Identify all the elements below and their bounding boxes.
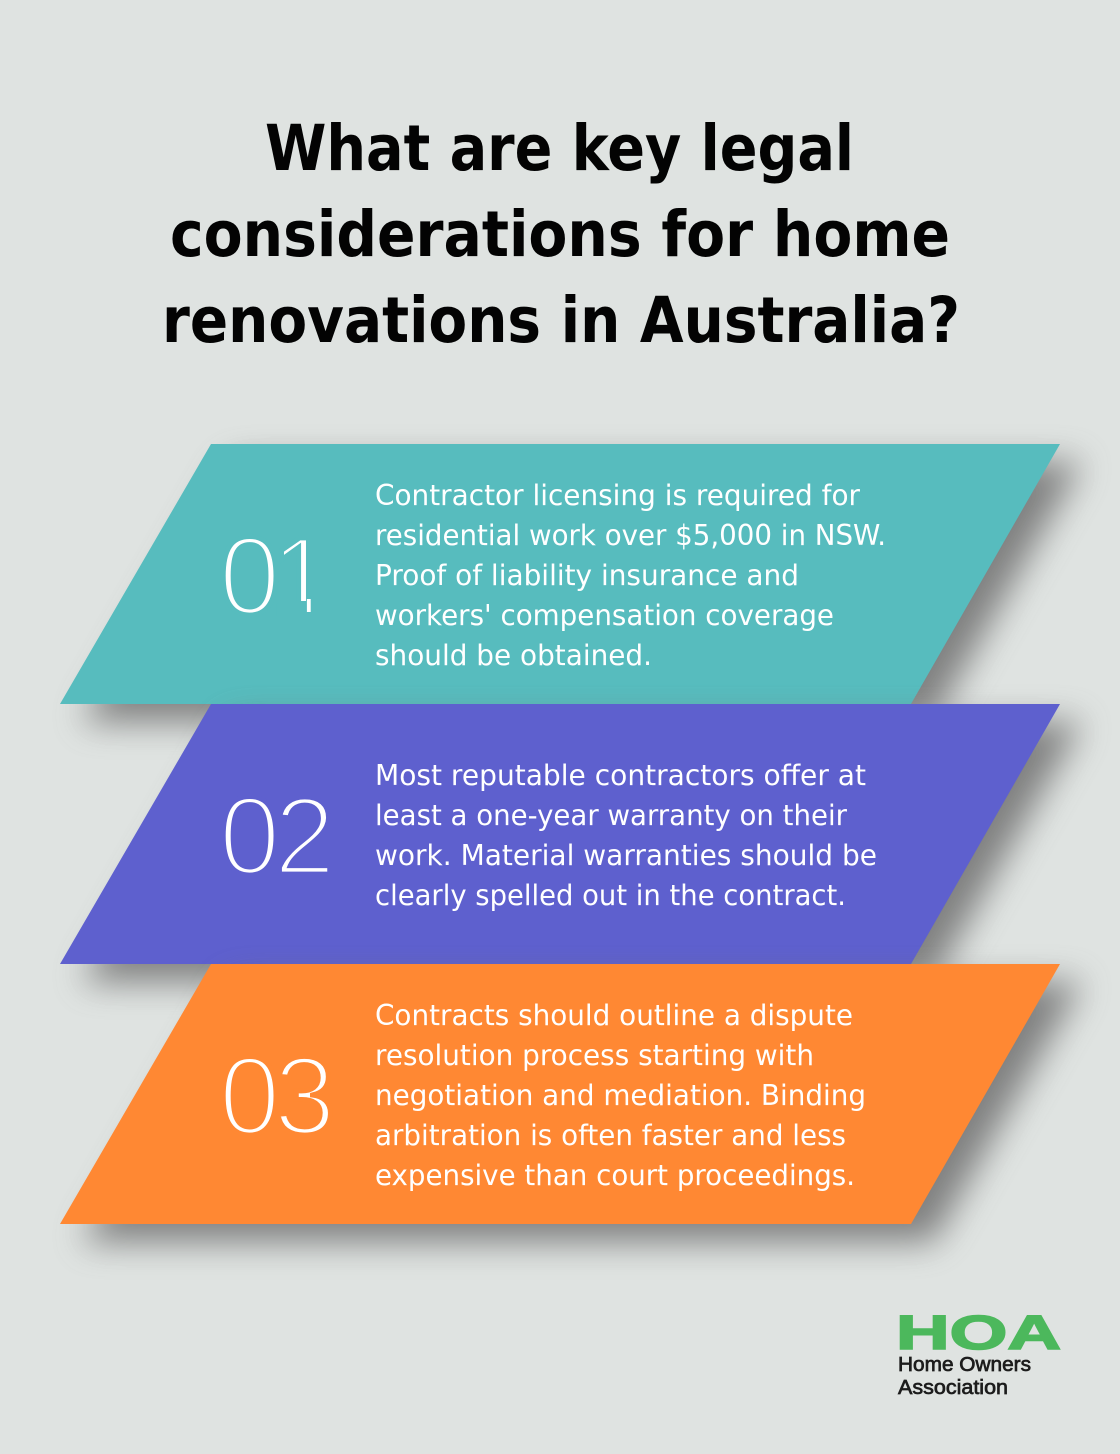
text: step 01 description bbox=[375, 478, 886, 672]
panel: step 03 dispute resolution bbox=[60, 964, 1082, 1242]
title bbox=[162, 112, 960, 357]
panel shape: orange parallelogram bbox=[60, 964, 1060, 1224]
number 01: 01 bbox=[219, 515, 332, 638]
number 03: 03 bbox=[219, 1035, 335, 1158]
text: step 02 description: Most reputable contractors offer at bbox=[375, 758, 866, 792]
text: step 03 description: Contracts should outline a dispute bbox=[375, 998, 853, 1032]
text: step 02 description: clearly spelled out in the contract. bbox=[375, 878, 846, 912]
panel shape: purple parallelogram bbox=[60, 704, 1060, 964]
logo: Home Owners Association: HOA bbox=[896, 1307, 1061, 1360]
title: What are key legal bbox=[265, 112, 854, 185]
panel shape: teal parallelogram bbox=[60, 444, 1060, 704]
number 03: 03 bbox=[219, 1035, 335, 1158]
title: renovations in Australia? bbox=[162, 284, 960, 357]
title: considerations for home bbox=[170, 198, 950, 271]
text: step 01 description: Proof of liability insurance and bbox=[375, 558, 799, 592]
text: step 03 description: resolution process starting with bbox=[375, 1038, 814, 1072]
text: step 03 description: arbitration is often faster and less bbox=[375, 1118, 846, 1152]
logo: Home Owners Association: Home Owners bbox=[898, 1354, 1031, 1376]
panel: step 02 warranties bbox=[60, 704, 1082, 982]
text: step 03 description: expensive than court proceedings. bbox=[375, 1158, 855, 1192]
text: step 01 description: Contractor licensing is required for bbox=[375, 478, 860, 512]
number 02: 02 bbox=[219, 775, 335, 898]
number 02: 02 bbox=[219, 775, 335, 898]
logo: Home Owners Association: Association bbox=[898, 1377, 1008, 1399]
number 01: 01 bbox=[219, 515, 332, 638]
text: step 03 description: negotiation and mediation. Binding bbox=[375, 1078, 866, 1112]
logo: Home Owners Association bbox=[896, 1307, 1061, 1399]
text: step 02 description: work. Material warranties should be bbox=[375, 838, 877, 872]
text: step 02 description bbox=[375, 758, 877, 912]
text: step 03 description bbox=[375, 998, 866, 1192]
text: step 01 description: residential work over $5,000 in NSW. bbox=[375, 518, 886, 552]
text: step 02 description: least a one-year warranty on their bbox=[375, 798, 847, 832]
text: step 01 description: workers' compensation coverage bbox=[375, 598, 834, 632]
panel: step 01 contractor licensing bbox=[60, 444, 1082, 722]
text: step 01 description: should be obtained. bbox=[375, 638, 652, 672]
